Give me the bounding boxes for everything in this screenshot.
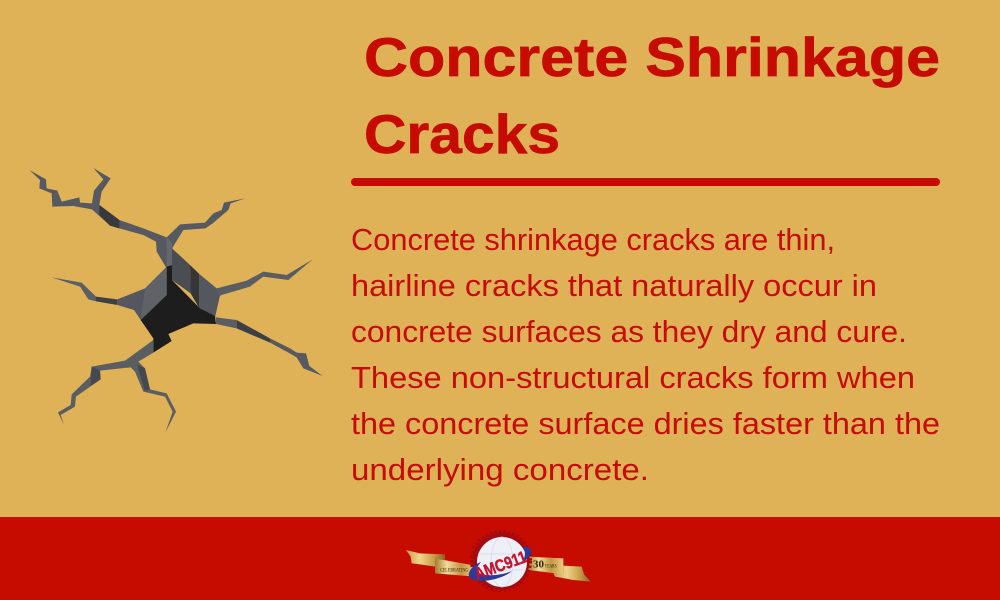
globe [477, 537, 527, 587]
body text [351, 222, 940, 487]
body text: underlying concrete. [351, 452, 649, 487]
footer band [0, 517, 1000, 600]
left ribbon [406, 550, 475, 577]
title underline [351, 178, 940, 186]
body text: hairline cracks that naturally occur in [351, 268, 877, 303]
icon: concrete crack [29, 168, 323, 433]
logo: AMC911 celebrating 30 years [406, 532, 591, 590]
sunburst seal [472, 532, 530, 590]
right ribbon: 30 [533, 558, 544, 570]
title [364, 26, 940, 165]
title: Concrete Shrinkage [364, 26, 940, 88]
AMC911 wordmark: AMC911 [472, 547, 529, 584]
right ribbon: YEARS [545, 565, 557, 570]
body text: These non-structural cracks form when [351, 360, 915, 395]
swoosh [469, 547, 531, 581]
left ribbon: CELEBRATING [440, 569, 469, 574]
body text: concrete surfaces as they dry and cure. [351, 314, 907, 349]
title: Cracks [364, 103, 560, 165]
body text: the concrete surface dries faster than the [351, 406, 940, 441]
right ribbon [528, 557, 591, 582]
body text: Concrete shrinkage cracks are thin, [351, 222, 835, 257]
